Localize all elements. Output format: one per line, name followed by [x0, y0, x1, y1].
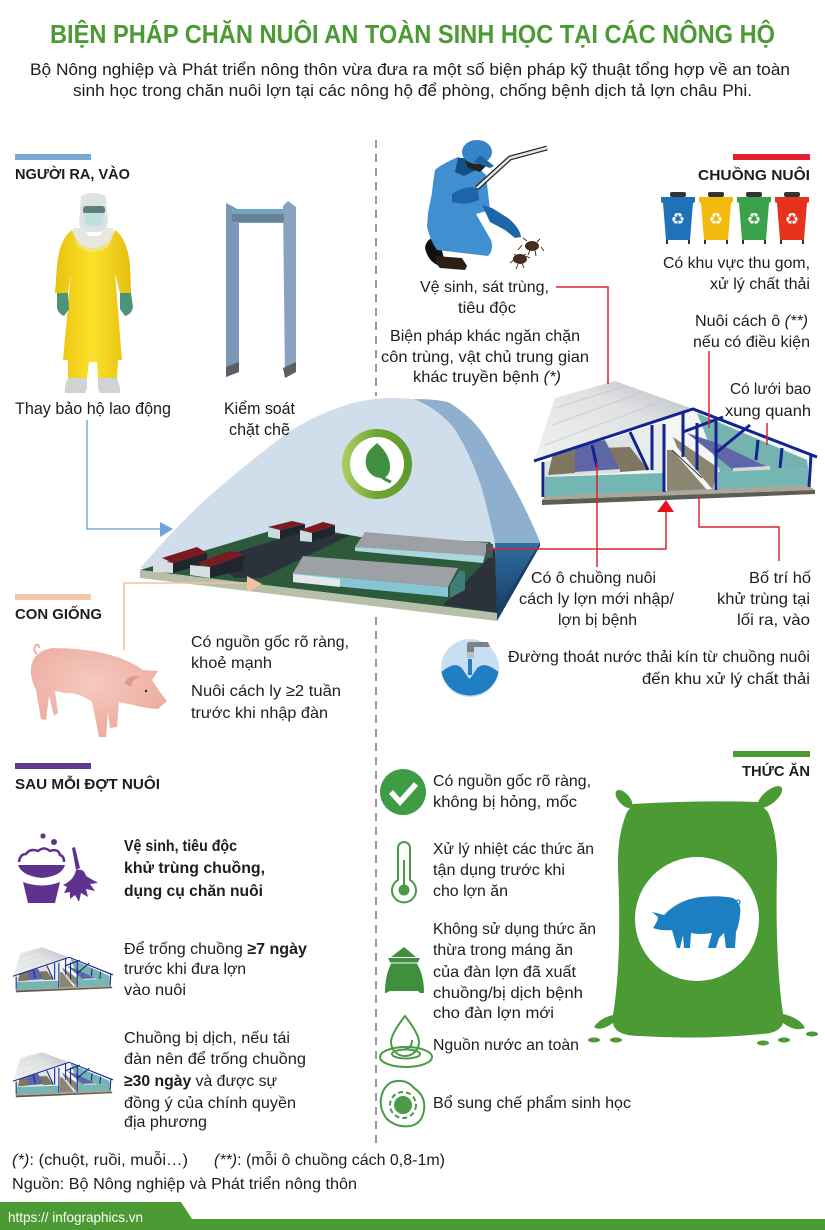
text: clear origin: Có nguồn gốc rõ ràng,	[433, 773, 591, 790]
text: leave empty 7 days: Để trống chuồng ≥7 ngày	[124, 940, 307, 958]
icon: cell	[381, 1081, 424, 1126]
intro text: sinh học trong chăn nuôi lợn tại các nông hộ để phòng, chống bệnh dịch tả lợn châu Phi.	[73, 81, 752, 100]
text: waste collection area	[663, 255, 810, 293]
arrow: red triangle	[657, 500, 674, 512]
text: origin and quarantine: khoẻ mạnh	[191, 655, 272, 672]
text: separate compartments: Nuôi cách ô (**)	[695, 313, 808, 330]
text: sanitation: tiêu độc	[458, 300, 516, 317]
text: no leftovers: Không sử dụng thức ăn	[433, 921, 596, 938]
text: sanitation	[420, 279, 549, 317]
icon: large feed sack with pig	[588, 782, 818, 1046]
ground	[140, 531, 540, 621]
heading: sau mỗi đợt nuôi: SAU MỖI ĐỢT NUÔI	[15, 775, 160, 793]
text: clear origin: không bị hỏng, mốc	[433, 794, 577, 811]
text: strict control: chặt chẽ	[229, 420, 290, 439]
text: cleaning and disinfection	[124, 838, 265, 900]
heading: thức ăn: THỨC ĂN	[742, 762, 810, 780]
illustration: biosecurity dome farm	[140, 398, 540, 621]
text: heat treatment: Xử lý nhiệt các thức ăn	[433, 841, 594, 858]
houses with red roofs	[153, 521, 335, 578]
panel: pen	[381, 140, 817, 697]
text: quarantine pen: cách ly lợn mới nhập/	[519, 591, 675, 608]
text: quarantine pen: Có ô chuồng nuôi	[531, 570, 656, 587]
icon: green leaf ring	[346, 433, 408, 495]
text: separate compartments	[693, 313, 810, 351]
text: leave empty 7 days: vào nuôi	[124, 982, 186, 999]
text: safe water: Nguồn nước an toàn	[433, 1037, 579, 1054]
text: closed drainage	[508, 649, 810, 688]
text: origin and quarantine	[191, 634, 349, 722]
text: cleaning and disinfection: khử trùng chuồng,	[124, 860, 265, 877]
text: quarantine pen: lợn bị bệnh	[558, 612, 637, 629]
text: pest prevention	[381, 328, 589, 386]
icon: protective suit	[55, 193, 133, 393]
icon: cleaning bucket and broom	[18, 833, 98, 903]
text: leave empty 7 days	[124, 940, 307, 999]
text: leave empty 30 days: Chuồng bị dịch, nếu tái	[124, 1030, 290, 1047]
text: pest prevention: khác truyền bệnh (*)	[413, 369, 561, 386]
text: origin and quarantine: Nuôi cách ly ≥2 tuần	[191, 683, 341, 700]
text: heat treatment: tận dụng trước khi	[433, 862, 565, 879]
text: disinfection pit: lối ra, vào	[737, 612, 810, 629]
intro text: Bộ Nông nghiệp và Phát triển nông thôn vừa đưa ra một số biện pháp kỹ thuật tổng hợp về an toàn	[30, 60, 790, 79]
icon: small barn	[13, 1052, 113, 1097]
icon: spiders	[510, 238, 544, 269]
heading: con giống: CON GIỐNG	[15, 605, 102, 623]
illustration: large barn	[534, 381, 817, 505]
text: origin and quarantine: trước khi nhập đàn	[191, 705, 328, 722]
panel: people in and out	[15, 154, 296, 439]
source: Nguồn: Bộ Nông nghiệp và Phát triển nông thôn	[12, 1175, 357, 1193]
text: cleaning and disinfection: dụng cụ chăn nuôi	[124, 883, 263, 900]
icon: drainage pipe	[441, 639, 499, 697]
title: BIỆN PHÁP CHĂN NUÔI AN TOÀN SINH HỌC TẠI CÁC NÔNG HỘ	[50, 19, 775, 49]
text: no leftovers	[433, 921, 596, 1022]
text: heat treatment	[433, 841, 594, 900]
text: no leftovers: cho đàn lợn mới	[433, 1005, 554, 1022]
text: quarantine pen	[519, 570, 675, 629]
text: strict control	[224, 399, 295, 439]
heading: con giống	[15, 594, 102, 623]
icon: sprayer worker	[425, 140, 547, 270]
icon: four recycling bins: ♻	[710, 212, 722, 226]
connector lines	[488, 287, 779, 567]
text: closed drainage: đến khu xử lý chất thải	[642, 671, 810, 688]
arrow: people to farm	[87, 420, 173, 537]
text: leave empty 7 days: trước khi đưa lợn	[124, 961, 246, 978]
text: waste collection area: xử lý chất thải	[710, 276, 810, 293]
text: leave empty 30 days	[124, 1030, 306, 1131]
text: no leftovers: thừa trong máng ăn	[433, 942, 573, 959]
text: biological supplement: Bổ sung chế phẩm sinh học	[433, 1094, 631, 1112]
icon: water drop	[380, 1016, 432, 1067]
heading: chuồng nuôi	[698, 154, 810, 184]
icon: check mark	[380, 769, 426, 815]
text: origin and quarantine: Có nguồn gốc rõ ràng,	[191, 634, 349, 651]
text: surrounding net: Có lưới bao	[730, 381, 811, 398]
footnotes	[12, 1150, 445, 1169]
long barns	[293, 532, 493, 598]
text: pest prevention: Biện pháp khác ngăn chặn	[390, 328, 580, 345]
text: separate compartments: nếu có điều kiện	[693, 334, 810, 351]
text: disinfection pit: Bố trí hố	[749, 570, 811, 587]
heading: chuồng nuôi: CHUỒNG NUÔI	[698, 166, 810, 184]
text: leave empty 30 days: ≥30 ngày và được sự	[124, 1073, 277, 1090]
text: leave empty 30 days: địa phương	[124, 1114, 207, 1131]
icon: four recycling bins	[661, 192, 809, 244]
text: leave empty 30 days: đàn nên để trống chuồng	[124, 1050, 306, 1068]
text: waste collection area: Có khu vực thu gom,	[663, 255, 810, 272]
text: no leftovers: của đàn lợn đã xuất	[433, 964, 577, 981]
panel: after each batch	[13, 763, 307, 1131]
text: sanitation: Vệ sinh, sát trùng,	[420, 279, 549, 296]
heading: người ra, vào	[15, 154, 130, 183]
icon: security gate	[226, 201, 296, 378]
text: leave empty 30 days: đồng ý của chính quyền	[124, 1095, 296, 1112]
text: clear origin	[433, 773, 591, 811]
text: cleaning and disinfection: Vệ sinh, tiêu độc	[124, 838, 237, 855]
text: surrounding net	[725, 381, 811, 420]
heading: thức ăn	[733, 751, 810, 780]
icon: four recycling bins: ♻	[748, 212, 760, 226]
icon: four recycling bins: ♻	[672, 212, 684, 226]
panel: breeding stock	[15, 594, 349, 737]
text: no leftovers: chuồng/bị dịch bệnh	[433, 985, 583, 1002]
arrow: breeding stock to farm	[124, 576, 262, 650]
intro text	[30, 60, 790, 100]
footer bar	[0, 1202, 825, 1230]
icon: small barn	[13, 947, 113, 992]
dome	[140, 398, 540, 620]
heading: sau mỗi đợt nuôi	[15, 763, 160, 793]
footnotes: (**): (mỗi ô chuồng cách 0,8-1m)	[214, 1150, 445, 1169]
text: heat treatment: cho lợn ăn	[433, 883, 508, 900]
text: closed drainage: Đường thoát nước thải kín từ chuồng nuôi	[508, 649, 810, 666]
icon: thermometer	[392, 842, 416, 902]
text: disinfection pit	[717, 570, 811, 629]
panel: feed	[380, 751, 818, 1126]
icon: four recycling bins: ♻	[786, 212, 798, 226]
text: surrounding net: xung quanh	[725, 403, 811, 420]
text: disinfection pit: khử trùng tại	[717, 591, 810, 608]
footer bar: https:// infographics.vn	[8, 1209, 143, 1225]
text: change protective gear: Thay bảo hộ lao động	[15, 399, 171, 418]
text: pest prevention: côn trùng, vật chủ trung gian	[381, 349, 589, 366]
footnotes: (*): (chuột, ruồi, muỗi…)	[12, 1150, 188, 1169]
text: strict control: Kiểm soát	[224, 399, 295, 418]
heading: người ra, vào: NGƯỜI RA, VÀO	[15, 165, 130, 183]
icon: pink pig	[31, 645, 167, 737]
icon: small feed sack	[385, 947, 424, 993]
